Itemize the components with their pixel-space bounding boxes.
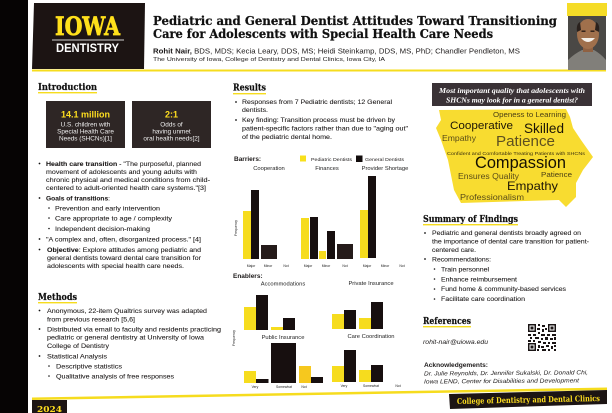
bar chart: provider shortage: Not bbox=[399, 264, 405, 268]
bar chart: public insurance: Not bbox=[301, 385, 307, 389]
chart legend: General Dentists bbox=[365, 157, 405, 162]
footer bbox=[32, 388, 607, 413]
heading: introduction: Introduction bbox=[38, 82, 97, 93]
results bullet text: dentists. bbox=[242, 107, 268, 114]
acknowledgements bbox=[424, 362, 588, 385]
methods bullet text: from previous research [5,6] bbox=[47, 316, 135, 324]
results bullet text: patient-specific factors rather than due to "aging out" bbox=[242, 126, 409, 132]
word cloud on Iowa map: Compassion bbox=[475, 153, 566, 172]
word cloud on Iowa map: Professionalism bbox=[460, 193, 524, 202]
stat box: 2:1: having unmet bbox=[152, 128, 191, 136]
stat box: 2:1 bbox=[132, 101, 211, 148]
intro bullet text: Health care transition - "The purposeful, planned bbox=[46, 161, 201, 168]
bar chart: provider shortage: Provider Shortage bbox=[362, 166, 408, 172]
word cloud on Iowa map: Cooperative bbox=[450, 120, 513, 132]
bar chart: public insurance: Very bbox=[252, 385, 259, 389]
iowa map shape bbox=[436, 109, 593, 207]
panel: methods bbox=[38, 292, 221, 380]
bar chart: care coordination: Not bbox=[395, 384, 401, 388]
header bbox=[32, 3, 607, 72]
bar chart: care coordination: Somewhat bbox=[363, 384, 379, 388]
header rule bbox=[32, 70, 606, 72]
panel: summary of findings bbox=[423, 214, 589, 303]
intro bullet text: general dentists toward dental care transition for bbox=[47, 255, 202, 262]
bar chart: cooperation: Frequency bbox=[234, 220, 238, 236]
title: Pediatric and General Dentist Attitudes Toward Transitioning bbox=[153, 13, 557, 28]
bar chart: care coordination bbox=[332, 334, 401, 388]
barriers label: Barriers: bbox=[234, 156, 261, 163]
intro bullet text: centered to adult-oriented health care systems."[3] bbox=[46, 185, 206, 192]
methods bullet text bbox=[39, 308, 221, 380]
footer rule bbox=[32, 388, 607, 400]
heading: results: Results bbox=[233, 82, 266, 94]
methods bullet text: pediatric or general dentistry at University of Iowa bbox=[47, 334, 204, 342]
summary bullet text: Fund home & community-based services bbox=[441, 286, 567, 293]
bar chart: public insurance: Public Insurance bbox=[262, 335, 304, 341]
year badge bbox=[32, 400, 67, 413]
heading: summary of findings: Summary of Findings bbox=[423, 214, 518, 225]
intro bullet text: Goals of transitions: bbox=[46, 196, 110, 202]
methods bullet text: Qualitative analysis of free responses bbox=[56, 374, 175, 380]
results bullet text bbox=[235, 99, 409, 141]
stat box: 2:1: Odds of bbox=[160, 122, 183, 128]
bar chart: provider shortage: Major bbox=[363, 264, 372, 268]
bar chart: accommodations bbox=[244, 282, 305, 330]
stat box: 14.1 million bbox=[46, 101, 125, 148]
intro bullet text: Objective: Explore attitudes among pediatric and bbox=[47, 247, 201, 254]
bar chart: private insurance bbox=[332, 281, 394, 329]
acknowledgements: Dr. Julie Reynolds, Dr. Jennifer Sukalski, Dr. Donald Chi, bbox=[424, 370, 588, 377]
word cloud on Iowa map: Empathy bbox=[507, 179, 558, 193]
left dark background band bbox=[0, 0, 28, 413]
logo: Iowa Dentistry bbox=[32, 3, 145, 69]
bar chart: finances: Finances bbox=[315, 166, 339, 172]
methods bullet text: College of Dentistry bbox=[47, 343, 110, 350]
results bullet text: Responses from 7 Pediatric dentists; 12 General bbox=[242, 99, 392, 106]
methods bullet text: Statistical Analysis bbox=[47, 354, 108, 360]
word cloud on Iowa map: Patience bbox=[541, 170, 572, 179]
title: Care for Adolescents with Special Health Care Needs bbox=[153, 26, 493, 41]
stat box: 14.1 million: U.S. children with bbox=[61, 122, 111, 128]
stat box: 2:1: 2:1 bbox=[165, 110, 178, 120]
methods bullet text: Distributed via email to faculty and residents practicing bbox=[47, 326, 221, 334]
summary bullet text bbox=[424, 230, 589, 303]
bar chart: cooperation: Cooperation bbox=[253, 166, 285, 172]
acknowledgements: Iowa LEND, Center for Disabilities and Development bbox=[424, 378, 579, 385]
summary bullet text: centered care. bbox=[432, 247, 476, 254]
stat box: 14.1 million: 14.1 million bbox=[61, 110, 110, 120]
stat box: 2:1: oral health needs[2] bbox=[143, 136, 200, 142]
summary bullet text: Pediatric and general dentists broadly agreed on bbox=[432, 230, 581, 237]
bar chart: provider shortage bbox=[360, 166, 408, 268]
intro bullet text: Prevention and early intervention bbox=[55, 206, 160, 212]
bar chart: cooperation: Minor bbox=[264, 264, 273, 268]
affiliation: The University of Iowa, College of Dentistry and Dental Clinics, Iowa City, IA bbox=[153, 57, 385, 63]
bar chart: private insurance: Private Insurance bbox=[348, 281, 394, 287]
bar chart: cooperation: Major bbox=[247, 264, 256, 268]
heading: references: References bbox=[423, 316, 471, 327]
word cloud on Iowa map: Skilled bbox=[524, 120, 564, 136]
college name banner bbox=[449, 390, 607, 409]
bar chart: care coordination: Care Coordination bbox=[347, 334, 395, 340]
chart legend bbox=[300, 156, 405, 162]
word cloud on Iowa map: Ensures Quality bbox=[458, 172, 519, 181]
title bbox=[153, 13, 557, 41]
intro bullet text bbox=[39, 161, 210, 270]
authors: Rohit Nair, BDS, MDS; Kecia Leary, DDS, MS; Heidi Steinkamp, DDS, MS, PhD; Chandler Pendleton, MS bbox=[153, 48, 520, 56]
callout: most important quality: SHCNs may look for in a general dentist? bbox=[446, 96, 579, 104]
bar chart: accommodations: Accommodations bbox=[261, 282, 305, 288]
chart legend: Pediatric Dentists bbox=[311, 157, 353, 162]
intro bullet text: "A complex and, often, disorganized process." [4] bbox=[46, 236, 201, 244]
author photo bbox=[567, 3, 607, 70]
intro bullet text: Care appropriate to age / complexity bbox=[55, 216, 173, 222]
intro bullet text: movement of adolescents and young adults with bbox=[46, 169, 197, 176]
panel: references bbox=[423, 316, 588, 385]
intro bullet text: chronic physical and medical conditions from child- bbox=[46, 177, 210, 184]
intro bullet text: adolescents with special health care needs. bbox=[47, 263, 184, 270]
bar chart: public insurance: Frequency bbox=[232, 330, 236, 346]
bar chart: finances: Major bbox=[304, 264, 313, 268]
word cloud on Iowa map: Confident and Comfortable Treating Patients with SHCNs bbox=[447, 151, 586, 156]
summary bullet text: the importance of dental care transition for patient- bbox=[432, 238, 589, 246]
panel: results bbox=[232, 82, 409, 389]
logo: Iowa Dentistry: DENTISTRY bbox=[56, 43, 119, 55]
bar chart: public insurance: Somewhat bbox=[276, 385, 292, 389]
bar chart: finances: Minor bbox=[322, 264, 331, 268]
bar chart: provider shortage: Minor bbox=[381, 264, 390, 268]
bar chart: public insurance bbox=[232, 330, 323, 389]
word cloud on Iowa map bbox=[436, 109, 593, 207]
panel: introduction bbox=[38, 82, 211, 270]
qr code bbox=[528, 324, 556, 351]
logo: Iowa Dentistry: IOWA bbox=[55, 12, 120, 41]
word cloud on Iowa map: Empathy bbox=[442, 133, 477, 143]
stat box: 14.1 million: Needs (SHCNs)[1] bbox=[59, 136, 112, 142]
heading: methods: Methods bbox=[38, 292, 77, 303]
acknowledgements: Acknowledgements: bbox=[424, 362, 488, 369]
methods bullet text: Descriptive statistics bbox=[56, 364, 123, 370]
results bullet text: Key finding: Transition process must be driven by bbox=[242, 117, 396, 124]
word cloud on Iowa map: Patience bbox=[496, 134, 555, 150]
word cloud on Iowa map: Openess to Learning bbox=[493, 110, 566, 119]
bar chart: finances: Not bbox=[342, 264, 348, 268]
contact email: rohit-nair@uiowa.edu bbox=[423, 339, 489, 346]
summary bullet text: Facilitate care coordination bbox=[441, 296, 525, 303]
bar chart: cooperation: Not bbox=[283, 264, 289, 268]
callout: most important quality bbox=[432, 83, 592, 106]
methods bullet text: Anonymous, 22-item Qualtrics survey was adapted bbox=[47, 308, 207, 315]
bar chart: care coordination: Very bbox=[341, 384, 348, 388]
results bullet text: of the pediatric dental home. bbox=[242, 134, 332, 141]
enablers label: Enablers: bbox=[233, 273, 263, 280]
intro bullet text: Independent decision-making bbox=[55, 226, 150, 233]
summary bullet text: Recommendations: bbox=[432, 256, 491, 264]
summary bullet text: Enhance reimbursement bbox=[441, 276, 517, 284]
summary bullet text: Train personnel bbox=[441, 266, 489, 274]
bar chart: cooperation bbox=[234, 166, 289, 268]
callout: most important quality: Most important quality that adolescents with bbox=[438, 87, 585, 95]
bar chart: finances bbox=[301, 166, 353, 268]
stat box: 14.1 million: Special Health Care bbox=[57, 128, 114, 136]
